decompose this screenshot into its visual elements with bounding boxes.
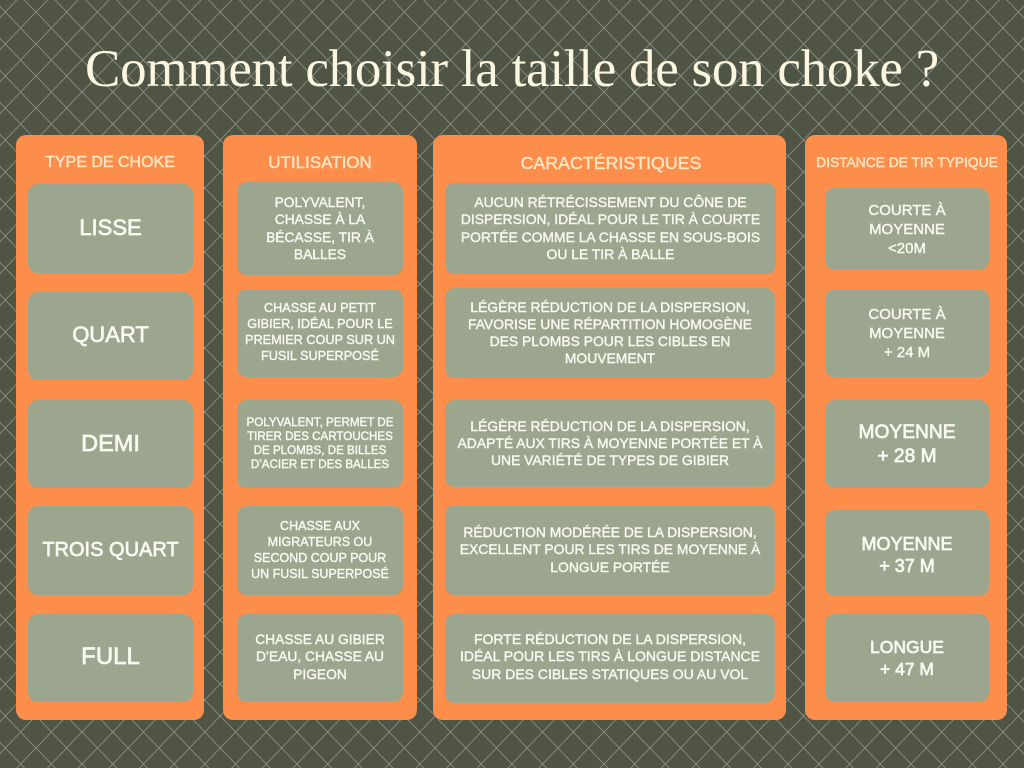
usage: demi: TIRER DES CARTOUCHES bbox=[247, 430, 393, 443]
feature: demi: UNE VARIÉTÉ DE TYPES DE GIBIER bbox=[491, 452, 729, 468]
row: trois quart bbox=[28, 506, 193, 595]
panel: utilisation bbox=[223, 135, 417, 720]
row: lisse: LISSE bbox=[79, 215, 142, 240]
feature: trois quart: EXCELLENT POUR LES TIRS DE MOYENNE À bbox=[460, 541, 760, 557]
usage: quart: CHASSE AU PETIT bbox=[264, 301, 376, 315]
usage: lisse: BALLES bbox=[294, 247, 346, 262]
distance: full: LONGUE bbox=[870, 637, 944, 657]
feature: quart: MOUVEMENT bbox=[565, 350, 655, 366]
row: quart: QUART bbox=[72, 322, 149, 347]
feature: lisse: PORTÉE COMME LA CHASSE EN SOUS-BOIS bbox=[461, 228, 760, 244]
usage: demi: D’ACIER ET DES BALLES bbox=[251, 458, 389, 471]
usage: full bbox=[237, 614, 403, 702]
usage: full: D’EAU, CHASSE AU bbox=[256, 649, 384, 664]
feature: quart bbox=[445, 288, 775, 378]
row: quart bbox=[28, 292, 193, 380]
usage: trois quart: CHASSE AUX bbox=[280, 518, 360, 532]
row: demi: DEMI bbox=[81, 430, 140, 456]
usage: demi bbox=[237, 400, 403, 488]
feature: quart: FAVORISE UNE RÉPARTITION HOMOGÈNE bbox=[468, 316, 752, 332]
distance: demi: + 28 M bbox=[877, 446, 937, 467]
usage: full: PIGEON bbox=[293, 667, 347, 682]
panel: distance de tir typique bbox=[805, 135, 1007, 720]
distance: lisse: COURTE À bbox=[868, 202, 946, 218]
usage: lisse: BÉCASSE, TIR À bbox=[266, 230, 374, 244]
row: lisse bbox=[28, 184, 193, 273]
distance: demi: MOYENNE bbox=[858, 422, 956, 443]
feature: quart: LÉGÈRE RÉDUCTION DE LA DISPERSION, bbox=[470, 299, 750, 315]
feature: full bbox=[445, 614, 775, 703]
row: full bbox=[28, 614, 193, 702]
distance: lisse: <20M bbox=[888, 240, 926, 256]
feature: lisse bbox=[445, 183, 776, 274]
feature: full: SUR DES CIBLES STATIQUES OU AU VOL bbox=[472, 666, 748, 682]
distance: full bbox=[825, 614, 989, 702]
usage: quart bbox=[237, 289, 403, 377]
row: full: FULL bbox=[81, 643, 140, 670]
usage: full: CHASSE AU GIBIER bbox=[255, 632, 385, 647]
distance: quart: COURTE À bbox=[868, 306, 946, 322]
panel: caractéristiques bbox=[433, 135, 786, 720]
panel: type de choke bbox=[16, 135, 204, 720]
feature: full: FORTE RÉDUCTION DE LA DISPERSION, bbox=[474, 631, 746, 647]
distance: lisse bbox=[825, 188, 989, 270]
heading: type de choke: TYPE DE CHOKE bbox=[45, 154, 175, 171]
heading: utilisation: UTILISATION bbox=[268, 153, 372, 172]
feature: demi bbox=[445, 400, 775, 487]
distance: lisse: MOYENNE bbox=[869, 220, 945, 238]
usage: trois quart bbox=[237, 506, 403, 595]
usage: trois quart: UN FUSIL SUPERPOSÉ bbox=[251, 566, 389, 580]
heading: caractéristiques: CARACTÉRISTIQUES bbox=[521, 153, 701, 173]
row: demi bbox=[28, 400, 193, 488]
feature: lisse: AUCUN RÉTRÉCISSEMENT DU CÔNE DE bbox=[474, 194, 747, 210]
distance: full: + 47 M bbox=[880, 659, 934, 679]
distance: quart: MOYENNE bbox=[869, 324, 945, 342]
feature: trois quart bbox=[445, 505, 775, 595]
usage: quart: FUSIL SUPERPOSÉ bbox=[261, 349, 379, 363]
usage: quart: PREMIER COUP SUR UN bbox=[245, 333, 395, 347]
feature: full: IDÉAL POUR LES TIRS À LONGUE DISTANCE bbox=[460, 648, 760, 664]
feature: quart: DES PLOMBS POUR LES CIBLES EN bbox=[490, 333, 730, 349]
feature: lisse: DISPERSION, IDÉAL POUR LE TIR À COURTE bbox=[461, 211, 760, 227]
title: Comment choisir la taille de son choke ? bbox=[85, 40, 939, 98]
distance: quart bbox=[825, 289, 989, 377]
feature: trois quart: RÉDUCTION MODÉRÉE DE LA DISPERSION, bbox=[463, 524, 757, 540]
distance: trois quart bbox=[825, 510, 989, 596]
feature: lisse: OU LE TIR À BALLE bbox=[547, 246, 674, 262]
usage: lisse bbox=[237, 182, 403, 275]
distance: quart: + 24 M bbox=[884, 344, 930, 360]
distance: demi bbox=[825, 400, 989, 488]
usage: trois quart: MIGRATEURS OU bbox=[268, 534, 372, 548]
distance: trois quart: MOYENNE bbox=[861, 534, 952, 554]
row: trois quart: TROIS QUART bbox=[42, 539, 179, 561]
usage: demi: POLYVALENT, PERMET DE bbox=[247, 416, 393, 429]
feature: demi: ADAPTÉ AUX TIRS À MOYENNE PORTÉE ET À bbox=[458, 435, 762, 451]
distance: trois quart: + 37 M bbox=[879, 556, 935, 576]
feature: trois quart: LONGUE PORTÉE bbox=[550, 559, 670, 575]
heading: distance de tir typique: DISTANCE DE TIR TYPIQUE bbox=[816, 155, 998, 170]
usage: trois quart: SECOND COUP POUR bbox=[254, 550, 386, 564]
usage: lisse: CHASSE À LA bbox=[275, 212, 365, 227]
feature: demi: LÉGÈRE RÉDUCTION DE LA DISPERSION, bbox=[470, 418, 750, 434]
usage: demi: DE PLOMBS, DE BILLES bbox=[254, 444, 386, 457]
usage: quart: GIBIER, IDÉAL POUR LE bbox=[247, 317, 393, 331]
usage: lisse: POLYVALENT, bbox=[275, 194, 365, 210]
